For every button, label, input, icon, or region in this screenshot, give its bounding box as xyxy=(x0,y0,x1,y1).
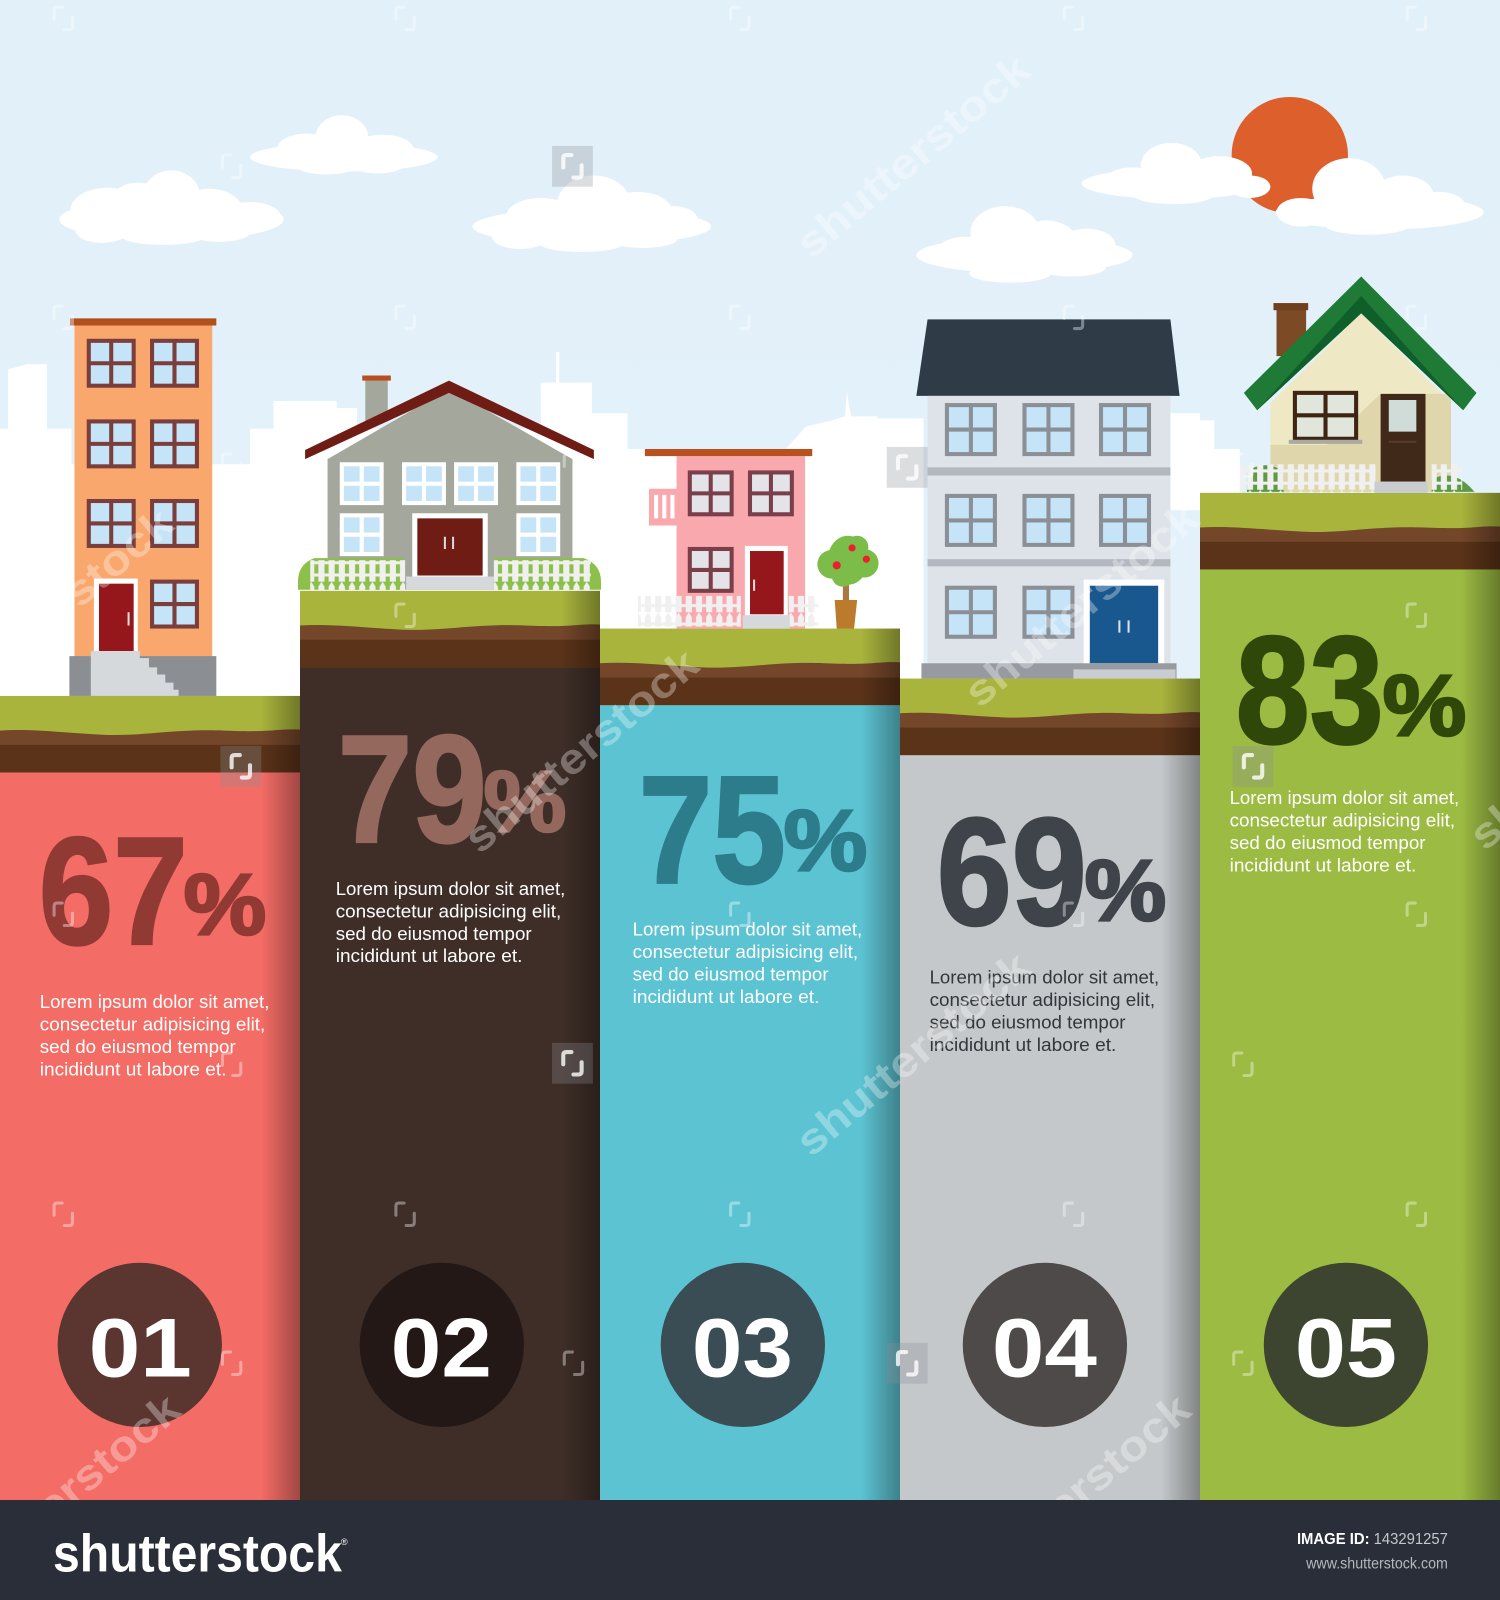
stat 79%: 79 xyxy=(338,704,487,875)
text block 2: Lorem ipsum dolor sit amet, xyxy=(336,878,565,899)
building 5: cream cottage xyxy=(1240,277,1477,493)
text block 3: incididunt ut labore et. xyxy=(633,986,819,1007)
column 3: teal xyxy=(600,629,900,1500)
watermark text: shutterstock xyxy=(455,640,708,863)
text block 1 xyxy=(40,991,269,1080)
number badge 04 xyxy=(963,1263,1127,1427)
footer logo: shutterstock xyxy=(53,1524,342,1583)
text block 2: consectetur adipisicing elit, xyxy=(336,900,561,921)
stat 75%: 75 xyxy=(639,745,786,916)
column 4: grey xyxy=(900,679,1200,1500)
site url: www.shutterstock.com xyxy=(1305,1555,1448,1572)
stat 67%: % xyxy=(184,857,266,954)
watermark marks xyxy=(54,7,1426,1384)
text block 4 xyxy=(930,967,1159,1055)
clouds xyxy=(59,115,1484,283)
image id: IMAGE ID: 143291257 xyxy=(1297,1531,1448,1548)
text block 1: Lorem ipsum dolor sit amet, xyxy=(40,991,269,1012)
text block 4: consectetur adipisicing elit, xyxy=(930,989,1155,1010)
text block 3: Lorem ipsum dolor sit amet, xyxy=(633,919,862,940)
text block 1: incididunt ut labore et. xyxy=(40,1059,227,1080)
footer bar xyxy=(0,1500,1500,1600)
text block 5: sed do eiusmod tempor xyxy=(1230,832,1426,853)
column 1: coral xyxy=(0,696,300,1500)
building 1: orange apartment xyxy=(69,318,216,696)
text block 4: Lorem ipsum dolor sit amet, xyxy=(930,967,1159,988)
number badge 05 xyxy=(1264,1263,1428,1427)
text block 2 xyxy=(336,878,565,966)
stat 69%: % xyxy=(1085,842,1166,939)
column 2: dark brown xyxy=(300,591,600,1500)
number badge 03: 03 xyxy=(692,1301,793,1395)
watermark text: shutterstock xyxy=(955,494,1208,717)
text block 1: consectetur adipisicing elit, xyxy=(40,1014,265,1035)
number badge 01: 01 xyxy=(89,1301,192,1395)
text block 2: incididunt ut labore et. xyxy=(336,945,522,966)
registered mark: ® xyxy=(341,1537,348,1547)
text block 5 xyxy=(1230,787,1459,875)
text block 4: sed do eiusmod tempor xyxy=(930,1012,1126,1033)
text block 5: incididunt ut labore et. xyxy=(1230,854,1416,875)
number badge 02: 02 xyxy=(391,1301,492,1395)
text block 3 xyxy=(633,919,862,1007)
number badge 01 xyxy=(58,1263,222,1427)
text block 1: sed do eiusmod tempor xyxy=(40,1036,236,1057)
watermark text: shutterstock xyxy=(787,943,1040,1166)
building 4: grey-blue townhouse xyxy=(916,319,1180,679)
stat 75%: % xyxy=(784,792,867,889)
text block 4: incididunt ut labore et. xyxy=(930,1034,1116,1055)
sun xyxy=(1232,97,1348,213)
tree in pot xyxy=(817,536,879,629)
stat 83%: 83 xyxy=(1236,605,1384,776)
text block 5: consectetur adipisicing elit, xyxy=(1230,810,1455,831)
text block 5: Lorem ipsum dolor sit amet, xyxy=(1230,787,1459,808)
text block 3: consectetur adipisicing elit, xyxy=(633,941,858,962)
number badge 05: 05 xyxy=(1295,1301,1397,1395)
stat 83%: % xyxy=(1383,658,1466,755)
text block 3: sed do eiusmod tempor xyxy=(633,964,829,985)
building 3: pink house xyxy=(638,449,818,629)
column 5: green xyxy=(1200,493,1500,1500)
number badge 04: 04 xyxy=(992,1301,1097,1395)
building 2: grey house xyxy=(298,376,601,591)
stat 69%: 69 xyxy=(937,786,1087,957)
stat 67%: 67 xyxy=(39,806,188,977)
watermark text: shutterstock xyxy=(787,45,1040,268)
number badge 03 xyxy=(661,1263,825,1427)
text block 2: sed do eiusmod tempor xyxy=(336,923,532,944)
stat 79%: % xyxy=(484,754,566,851)
number badge 02 xyxy=(360,1263,524,1427)
city skyline silhouette xyxy=(0,352,1240,714)
